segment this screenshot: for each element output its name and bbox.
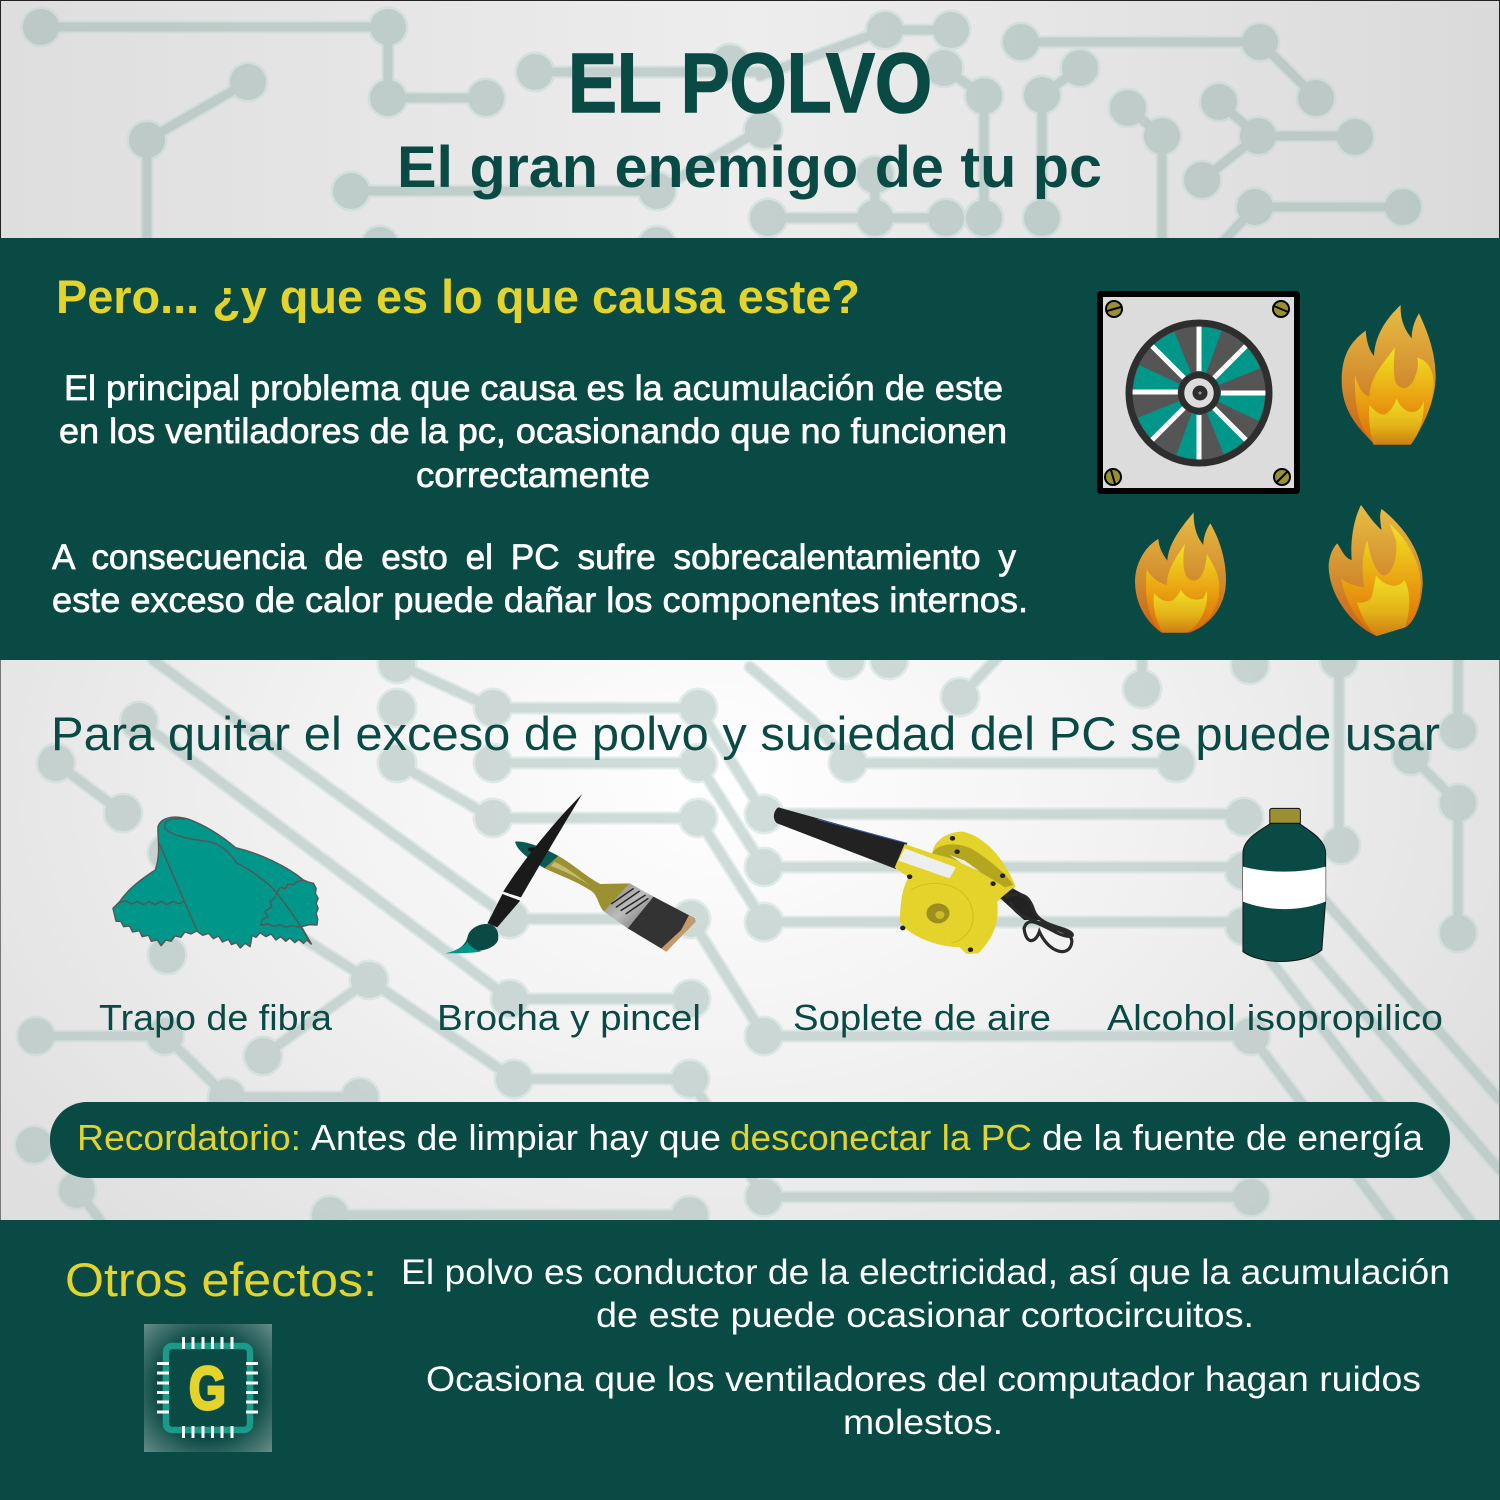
heading: causes: Pero... ¿y que es lo que causa este? [56, 270, 860, 323]
text block: overheating: A consecuencia de esto el PC sufre sobrecalentamiento y [52, 538, 1016, 577]
text block: fan problem [59, 369, 1007, 495]
callout: reminder: Antes de limpiar hay que [311, 1117, 721, 1158]
text block: overheating [52, 538, 1028, 620]
text block: noise: Ocasiona que los ventiladores del computador hagan ruidos [426, 1360, 1421, 1399]
text block: short circuits [401, 1253, 1450, 1335]
circuit pattern: tools [34, 655, 1500, 1220]
text block: overheating: este exceso de calor puede dañar los componentes internos. [52, 581, 1028, 620]
callout: reminder [50, 1102, 1450, 1178]
icon: flame bottom left [1135, 512, 1226, 633]
icon: alcohol bottle [1243, 808, 1326, 961]
circuit pattern: header [41, 27, 1403, 245]
panel: cleaning tools [0, 655, 1500, 1220]
label: blower: Soplete de aire [793, 997, 1051, 1038]
heading: other effects: Otros efectos: [65, 1253, 377, 1306]
title: EL POLVO [568, 36, 932, 130]
text block: short circuits: de este puede ocasionar cortocircuitos. [596, 1296, 1254, 1335]
text block: short circuits: El polvo es conductor de la electricidad, así que la acumulación [401, 1253, 1450, 1292]
callout: reminder: Recordatorio: [77, 1117, 301, 1158]
panel: causes [0, 238, 1500, 660]
icon: flame bottom right [1329, 505, 1423, 636]
label: brush: Brocha y pincel [437, 997, 701, 1038]
text block: fan problem: El principal problema que causa es la acumulación de este [64, 369, 1003, 408]
icon: flame top right [1342, 305, 1436, 445]
text block: fan problem: en los ventiladores de la pc, ocasionando que no funcionen [59, 412, 1007, 451]
callout: reminder: desconectar la PC [730, 1117, 1032, 1158]
icon: paint brush [446, 794, 696, 953]
text block: noise: molestos. [843, 1403, 1003, 1442]
icon: cloth [113, 817, 318, 948]
icon: air blower [774, 807, 1072, 954]
panel: header [0, 0, 1500, 245]
heading: tools: Para quitar el exceso de polvo y suciedad del PC se puede usar [51, 707, 1440, 760]
subtitle: El gran enemigo de tu pc [397, 135, 1102, 200]
icon: chip logo [144, 1324, 272, 1452]
text block: fan problem: correctamente [416, 456, 650, 495]
callout: reminder: de la fuente de energía [1042, 1117, 1424, 1158]
text block: noise [426, 1360, 1421, 1442]
label: cloth: Trapo de fibra [99, 997, 333, 1038]
icon: chip logo: G [189, 1355, 226, 1422]
icon: fan [1100, 294, 1297, 491]
panel: other effects [0, 1220, 1500, 1500]
label: alcohol: Alcohol isopropilico [1107, 997, 1443, 1038]
